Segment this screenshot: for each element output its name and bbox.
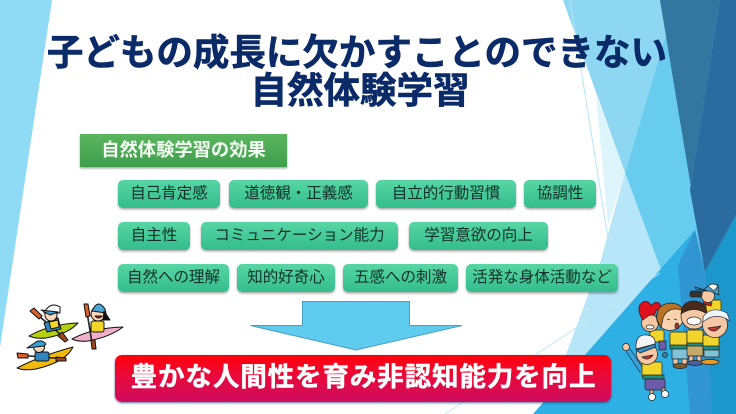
- tag: [118, 222, 190, 250]
- tag: 自主性: [131, 227, 177, 244]
- tag: 協調性: [537, 185, 583, 202]
- title: [47, 32, 667, 111]
- tag: [343, 264, 458, 292]
- callout: main result: [115, 355, 611, 402]
- title: 子どもの成長に欠かすことのできない: [47, 32, 667, 73]
- tag: [229, 180, 368, 208]
- arrow: down: [250, 301, 462, 350]
- tag: [409, 222, 548, 250]
- icon: kids kayaking: [16, 304, 124, 370]
- tag: 自然への理解: [127, 269, 220, 286]
- tag: 知的好奇心: [247, 269, 325, 286]
- panel: effect tags: [116, 180, 620, 295]
- tag: [201, 222, 398, 250]
- tag: 自己肯定感: [130, 185, 208, 202]
- octopus hat child: [639, 302, 668, 358]
- tag: 活発な身体活動など: [472, 269, 612, 286]
- tag: [118, 180, 220, 208]
- white cap child: [701, 310, 730, 364]
- tag: 学習意欲の向上: [424, 227, 533, 244]
- brown hair child: [656, 303, 688, 368]
- tag: 道徳観・正義感: [244, 185, 353, 202]
- tag: [524, 180, 596, 208]
- tag: コミュニケーション能力: [214, 227, 385, 244]
- callout: main result: 豊かな人間性を育み非認知能力を向上: [131, 362, 596, 392]
- tag: [118, 264, 229, 292]
- heading: effects of nature learning: [80, 134, 287, 167]
- heading: effects of nature learning: 自然体験学習の効果: [101, 139, 266, 160]
- tag: [466, 264, 618, 292]
- tag: [237, 264, 335, 292]
- title: 自然体験学習: [250, 70, 470, 111]
- tag: [376, 180, 516, 208]
- waving child: [622, 335, 668, 400]
- tag: 五感への刺激: [354, 269, 447, 286]
- icon: group of children in life vests: [622, 284, 730, 401]
- binocular child: [690, 284, 721, 314]
- laughing child: [681, 301, 707, 366]
- tag: 自立的行動習慣: [392, 185, 500, 202]
